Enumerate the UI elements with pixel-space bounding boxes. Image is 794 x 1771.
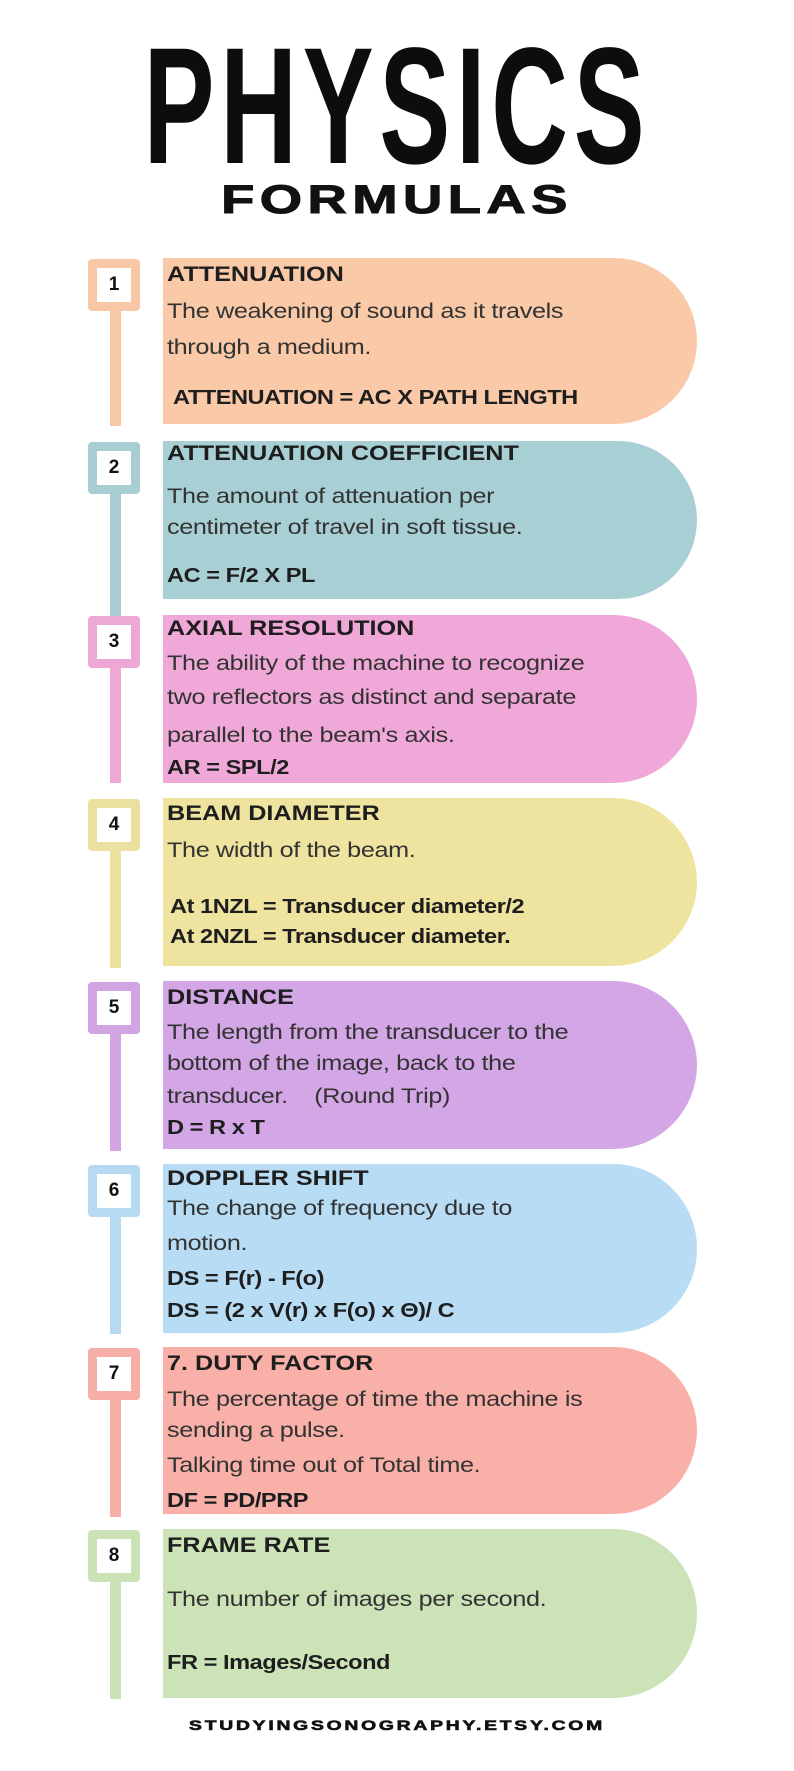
text 1: through a medium.	[167, 336, 371, 359]
panel 1: attenuation	[88, 258, 697, 426]
text 5	[167, 986, 568, 1139]
panel 2: attenuation coefficient	[88, 441, 697, 616]
footer: STUDYINGSONOGRAPHY.ETSY.COM	[189, 1717, 605, 1733]
text 6: The change of frequency due to	[167, 1197, 512, 1220]
text 3: The ability of the machine to recognize	[167, 652, 584, 675]
text 3: AR = SPL/2	[167, 757, 289, 779]
subtitle: FORMULAS	[221, 178, 573, 222]
text 4: At 2NZL = Transducer diameter.	[170, 926, 510, 948]
text 5: DISTANCE	[167, 986, 294, 1009]
text 8	[167, 1534, 546, 1674]
text 5: The length from the transducer to the	[167, 1021, 568, 1044]
text 2: AC = F/2 X PL	[167, 565, 315, 587]
panel 5: distance	[88, 981, 697, 1151]
panel 8: frame rate: 8	[109, 1545, 119, 1566]
text 6: motion.	[167, 1232, 247, 1255]
text 2: centimeter of travel in soft tissue.	[167, 516, 522, 539]
panel 7: duty factor	[88, 1347, 697, 1517]
text 2: The amount of attenuation per	[167, 485, 494, 508]
panel 2: attenuation coefficient: 2	[109, 457, 119, 478]
text 6: DS = (2 x V(r) x F(o) x Θ)/ C	[167, 1300, 454, 1322]
text 6: DOPPLER SHIFT	[167, 1167, 369, 1190]
panel 3: axial resolution: 3	[109, 631, 119, 652]
text 3	[167, 617, 584, 779]
text 1	[167, 263, 578, 409]
panel 6: doppler shift	[88, 1164, 697, 1334]
text 4: At 1NZL = Transducer diameter/2	[170, 896, 524, 918]
text 2: ATTENUATION COEFFICIENT	[167, 442, 519, 465]
panel 8: frame rate	[88, 1529, 697, 1699]
panel 4: beam diameter: 4	[109, 814, 119, 835]
text 4: BEAM DIAMETER	[167, 802, 380, 825]
text 6	[167, 1167, 512, 1322]
text 8: FRAME RATE	[167, 1534, 330, 1557]
text 7: The percentage of time the machine is	[167, 1388, 582, 1411]
text 5: D = R x T	[167, 1117, 264, 1139]
text 2	[167, 442, 522, 587]
title: PHYSICS	[144, 14, 650, 199]
text 7	[167, 1352, 582, 1512]
text 7: Talking time out of Total time.	[167, 1454, 480, 1477]
panel 4: beam diameter	[88, 798, 697, 968]
text 7: 7. DUTY FACTOR	[167, 1352, 373, 1375]
text 7: sending a pulse.	[167, 1419, 345, 1442]
text 3: parallel to the beam's axis.	[167, 724, 454, 747]
text 3: two reflectors as distinct and separate	[167, 686, 576, 709]
text 8: FR = Images/Second	[167, 1652, 390, 1674]
text 5: transducer. (Round Trip)	[167, 1085, 450, 1108]
text 4: The width of the beam.	[167, 839, 415, 862]
panel 5: distance: 5	[109, 997, 119, 1018]
text 5: bottom of the image, back to the	[167, 1052, 516, 1075]
text 7: DF = PD/PRP	[167, 1490, 308, 1512]
panel 7: duty factor: 7	[109, 1363, 119, 1384]
text 1: ATTENUATION = AC X PATH LENGTH	[173, 387, 578, 409]
text 4	[167, 802, 524, 948]
text 1: The weakening of sound as it travels	[167, 300, 563, 323]
panel 3: axial resolution	[88, 615, 697, 783]
text 1: ATTENUATION	[167, 263, 344, 286]
text 6: DS = F(r) - F(o)	[167, 1268, 324, 1290]
panel 6: doppler shift: 6	[109, 1180, 119, 1201]
text 8: The number of images per second.	[167, 1588, 546, 1611]
panel 1: attenuation: 1	[109, 274, 119, 295]
text 3: AXIAL RESOLUTION	[167, 617, 414, 640]
